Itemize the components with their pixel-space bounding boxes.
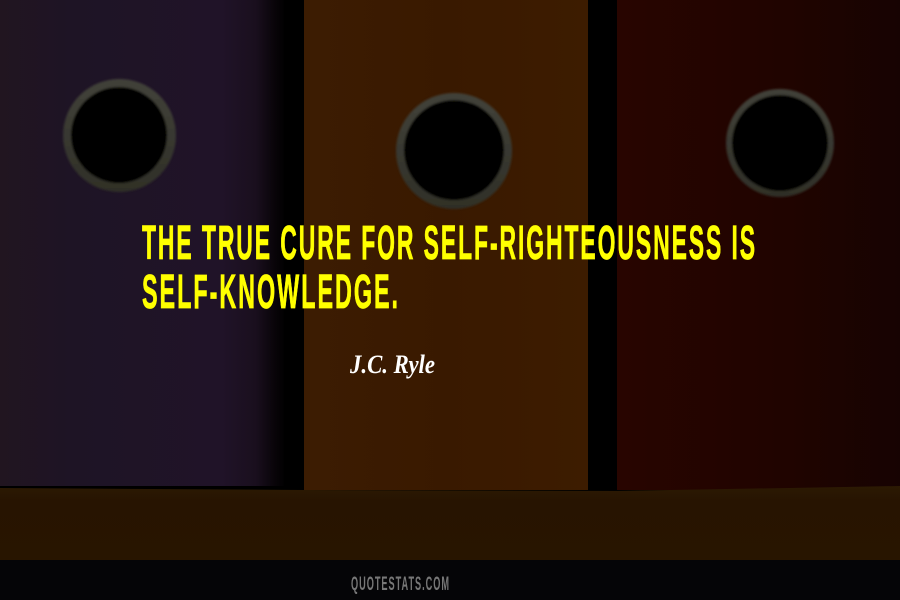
quote heading: SELF-KNOWLEDGE. [142, 266, 400, 319]
panel: red binder [617, 0, 900, 490]
panel: dark floor strip [0, 560, 900, 600]
panel: purple binder [0, 0, 284, 486]
icon: right binder ring hole [726, 89, 834, 197]
panel: wooden shelf [0, 486, 900, 560]
author name: J.C. Ryle [349, 350, 435, 379]
quote heading [142, 217, 757, 319]
icon: left binder ring hole [63, 79, 176, 192]
scene: quote card with binders on a shelf: QUOTESTATS.COM [351, 574, 450, 595]
panel: orange binder [304, 0, 588, 490]
icon: middle binder ring hole [396, 93, 512, 209]
